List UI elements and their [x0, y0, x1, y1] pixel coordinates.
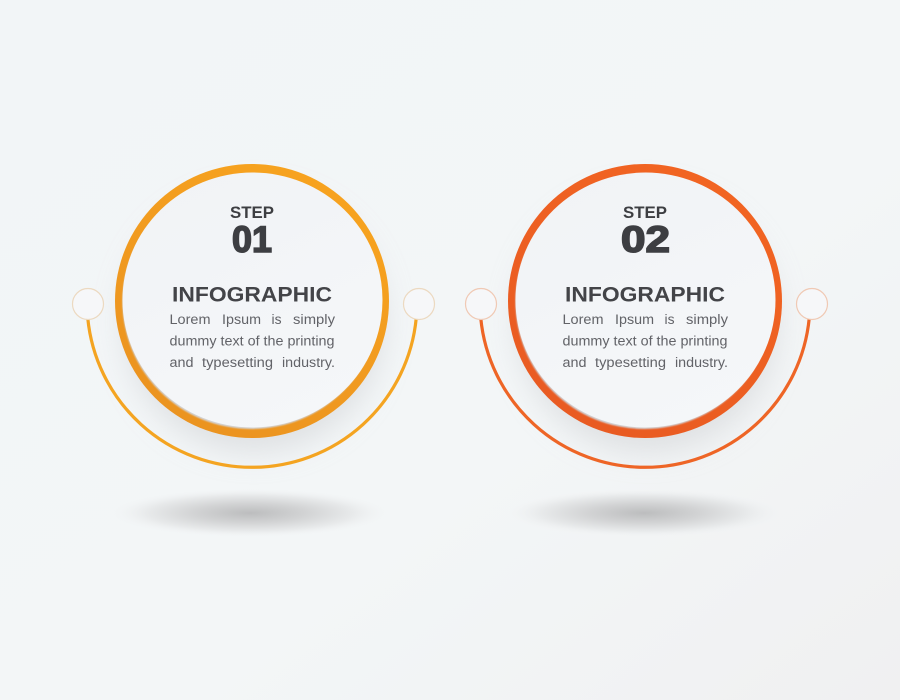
heading: INFOGRAPHIC: INFOGRAPHIC	[172, 284, 332, 306]
body text: industry.	[282, 355, 335, 370]
body text: and	[562, 355, 586, 370]
floor shadow: step 01	[112, 489, 388, 537]
thick ring: step 02	[508, 164, 782, 438]
body text: Ipsum	[615, 312, 654, 327]
body text: dummy text of the printing	[562, 334, 728, 348]
heading: INFOGRAPHIC: INFOGRAPHIC	[565, 284, 725, 306]
number: 02: 02	[621, 219, 670, 260]
body text: typesetting	[202, 355, 273, 370]
disc edge shadow: step 01	[122, 175, 380, 429]
panel: step 01	[72, 164, 434, 537]
number: 01: 01	[232, 219, 272, 260]
body text: is	[664, 312, 675, 327]
body text: simply	[686, 312, 728, 327]
label: STEP: STEP	[230, 204, 274, 222]
lower arc: step 02	[481, 318, 809, 467]
body text: industry.	[675, 355, 728, 370]
body text	[562, 312, 728, 370]
body text: Lorem	[562, 312, 604, 327]
left connector bubble: step 01	[72, 288, 104, 320]
thick ring: step 01	[115, 164, 389, 438]
left connector bubble: step 02	[466, 288, 496, 320]
body text	[170, 312, 335, 370]
lower arc: step 01	[88, 318, 416, 467]
body text: Lorem	[170, 312, 210, 327]
label: STEP: STEP	[623, 204, 667, 222]
floor shadow: step 02	[506, 489, 782, 537]
right connector bubble: step 02	[796, 288, 828, 320]
right connector bubble: step 01	[404, 288, 434, 320]
white disc: step 01	[122, 172, 382, 428]
white disc: step 02	[516, 172, 776, 428]
body text: is	[272, 312, 282, 327]
body text: Ipsum	[222, 312, 261, 327]
panel: step 02	[466, 164, 828, 537]
soft shadow under circle: step 02	[517, 192, 777, 452]
body text: simply	[293, 312, 335, 327]
body text: typesetting	[595, 355, 666, 370]
body text: dummy text of the printing	[170, 334, 334, 348]
disc edge shadow: step 02	[516, 175, 774, 429]
soft shadow under circle: step 01	[124, 192, 384, 452]
body text: and	[170, 355, 194, 370]
